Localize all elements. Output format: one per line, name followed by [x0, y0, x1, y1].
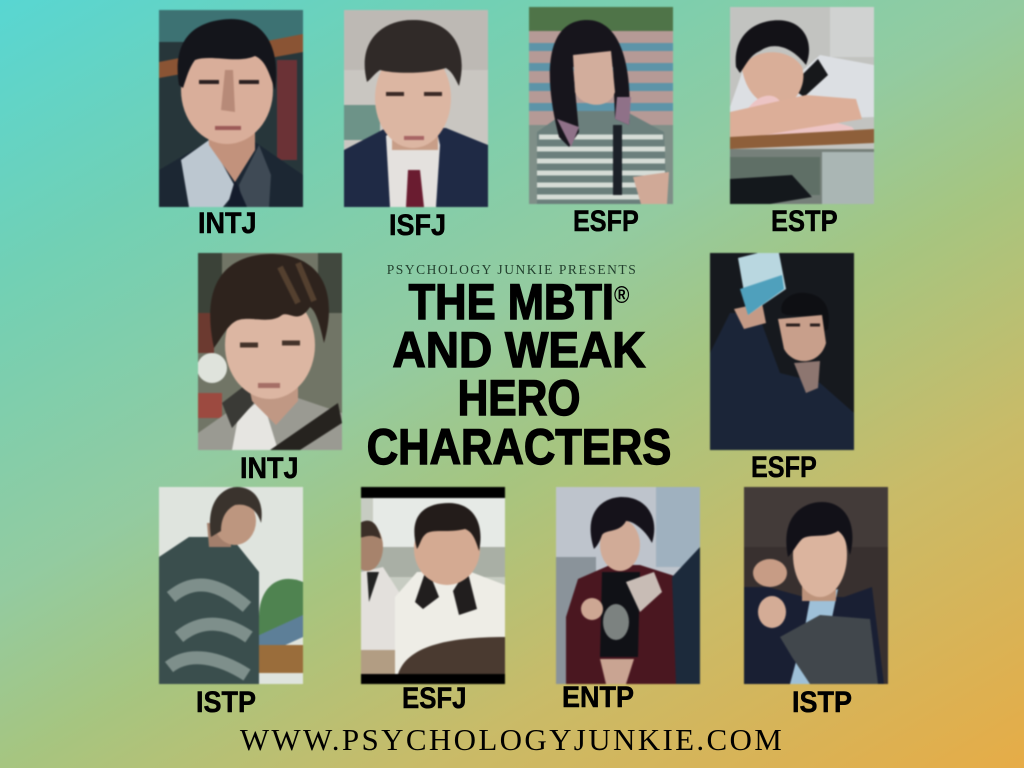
label: ISTP right: ISTP — [792, 686, 852, 719]
title: CHARACTERS — [367, 419, 671, 475]
photo: ISTP boy in fighting stance — [743, 486, 889, 685]
photo: ESFP girl in striped sweater — [528, 6, 674, 205]
label: ESTP: ESTP — [771, 205, 838, 238]
photo: ESFP boy raising a can — [709, 252, 855, 451]
label: INTJ second row: INTJ — [240, 452, 299, 485]
label: ESFJ: ESFJ — [402, 682, 467, 715]
photo: INTJ boy with backpack — [197, 252, 343, 451]
label: ISFJ: ISFJ — [389, 209, 446, 242]
label: INTJ: INTJ — [198, 207, 257, 240]
title: THE MBTI® — [409, 274, 629, 330]
photo: INTJ character in school uniform — [158, 9, 304, 208]
label: ENTP: ENTP — [562, 681, 634, 714]
label: ISTP: ISTP — [196, 686, 256, 719]
photo: ENTP boy in red varsity jacket — [555, 486, 701, 685]
label: ESFP: ESFP — [573, 205, 639, 238]
photo: ISFJ character in navy blazer — [343, 9, 489, 208]
presenter line: PSYCHOLOGY JUNKIE PRESENTS — [387, 262, 637, 277]
website url: WWW.PSYCHOLOGYJUNKIE.COM — [240, 722, 784, 757]
title — [367, 274, 671, 475]
title: AND WEAK — [392, 322, 645, 378]
label: ESFP second row: ESFP — [751, 451, 817, 484]
photo: ISTP man with tie-dye sweater — [158, 486, 304, 685]
title: HERO — [458, 370, 580, 426]
photo: ESFJ boy in school uniform with black bars — [360, 486, 506, 685]
photo: ESTP boy resting on desk — [729, 6, 875, 205]
